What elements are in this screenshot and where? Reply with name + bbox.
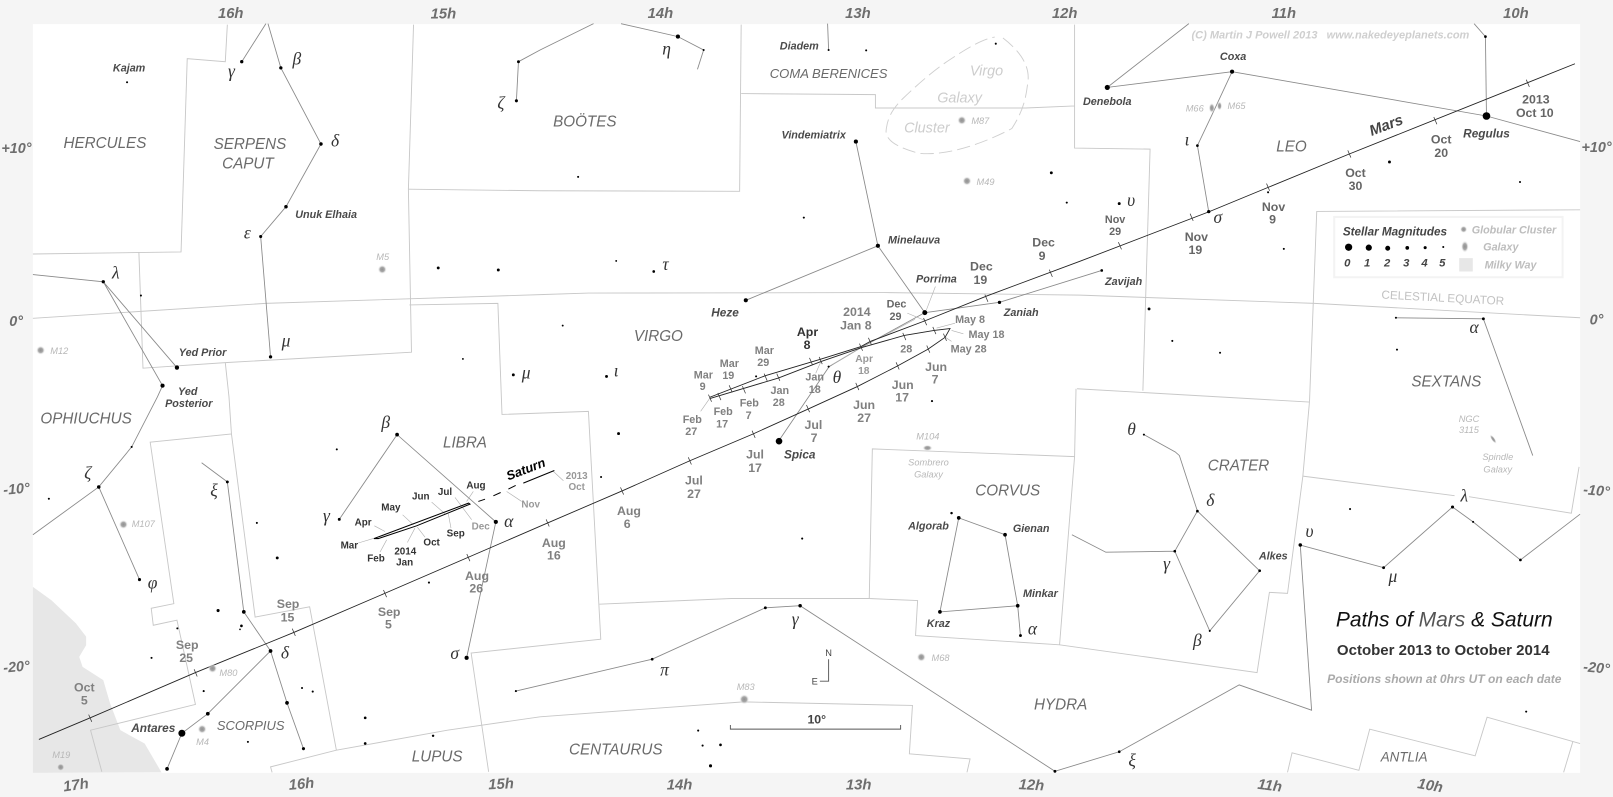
greek letters: γ	[792, 609, 800, 629]
legend: stellar magnitudes: Galaxy	[1483, 241, 1520, 253]
right axis declination labels: -20°	[1583, 659, 1611, 678]
mars date labels: May 8	[955, 314, 985, 326]
top axis hour labels: 12h	[1052, 6, 1077, 22]
title: Paths of Mars & Saturn	[1336, 608, 1553, 631]
virgo galaxy cluster label: Virgo	[970, 64, 1003, 80]
greek letters: θ	[833, 367, 842, 387]
mars date labels: Dec	[887, 298, 906, 310]
mars date labels: Nov	[1105, 214, 1125, 226]
greek letters	[84, 39, 1480, 770]
star names: Zavijah	[1104, 276, 1143, 288]
name: bootes: BOÖTES	[553, 112, 617, 130]
magnitude numbers	[1344, 257, 1446, 269]
virgo galaxy cluster outline	[886, 37, 1028, 154]
mars date labels: 19	[973, 273, 987, 287]
star names: Heze	[711, 306, 739, 320]
mars date labels: 17	[716, 418, 728, 430]
mars date labels: 17	[895, 390, 909, 404]
mars date labels: Jan	[770, 385, 789, 397]
deep sky labels	[50, 101, 1514, 760]
greek letters: ε	[244, 223, 251, 243]
figure: leo	[1107, 24, 1580, 212]
deep sky labels: Galaxy	[1483, 465, 1514, 475]
mars date labels: 5	[81, 694, 88, 708]
mars date labels: 6	[624, 517, 631, 531]
greek letters: γ	[228, 61, 236, 81]
mars date labels	[74, 93, 1554, 708]
star names: Porrima	[916, 273, 957, 285]
right axis declination labels	[1581, 140, 1612, 678]
top axis hour labels: 15h	[431, 7, 456, 23]
figure: crater	[1072, 435, 1260, 631]
mars date labels: Jan 8	[840, 318, 872, 332]
greek letters: β	[380, 412, 390, 432]
deep sky labels: M65	[1227, 101, 1246, 111]
greek letters: μ	[521, 362, 531, 382]
name: crater: CRATER	[1208, 458, 1269, 475]
name: hydra: HYDRA	[1034, 697, 1087, 714]
name: serpens caput: SERPENS	[214, 136, 286, 153]
deep sky labels: 3115	[1459, 425, 1480, 435]
title block	[1327, 608, 1562, 686]
top axis hour labels	[218, 6, 1529, 23]
left axis declination labels: -20°	[3, 658, 31, 677]
mars date labels: Jul	[685, 474, 703, 488]
key: milky way	[1459, 258, 1473, 271]
deep sky labels: NGC	[1459, 414, 1480, 424]
name: hercules: HERCULES	[63, 135, 146, 152]
mars date labels: Jul	[746, 448, 764, 462]
figure: scorpius	[167, 463, 303, 769]
deep sky labels: Galaxy	[914, 470, 944, 480]
mars date labels: 7	[811, 431, 818, 445]
star names: Gienan	[1013, 523, 1050, 535]
mars date labels: Feb	[714, 406, 733, 418]
star names: Diadem	[780, 40, 819, 52]
figure: serpens	[242, 24, 321, 357]
top axis hour labels: 14h	[648, 6, 673, 22]
greek letters: β	[1192, 630, 1202, 650]
figure: corvus	[940, 518, 1020, 636]
copyright	[1192, 30, 1470, 42]
deep sky labels: Sombrero	[908, 458, 949, 468]
deep sky labels: Spindle	[1482, 452, 1513, 462]
legend: stellar magnitudes	[1334, 217, 1563, 277]
star names: Antares	[130, 721, 176, 735]
name: serpens caput: CAPUT	[222, 156, 275, 173]
copyright: (C) Martin J Powell 2013	[1192, 30, 1317, 42]
bottom axis hour labels	[62, 776, 1444, 796]
mars date labels: Mar	[755, 345, 775, 357]
deep sky labels: M49	[976, 177, 994, 187]
saturn date labels: Dec	[472, 521, 490, 532]
figure: libra	[339, 435, 496, 658]
mars date labels: 2014	[843, 305, 871, 319]
name: libra: LIBRA	[443, 435, 487, 452]
magnitude numbers: 5	[1439, 257, 1446, 269]
greek letters: θ	[1127, 419, 1136, 439]
star names: Spica	[784, 447, 816, 461]
mars date labels: Mar	[720, 358, 740, 370]
greek letters: η	[662, 39, 671, 59]
star names: Yed	[178, 386, 198, 398]
saturn date labels: Oct	[423, 538, 441, 549]
saturn date labels: Mar	[341, 540, 358, 551]
saturn date labels: May	[381, 503, 401, 514]
mars date labels: 29	[1109, 226, 1121, 238]
mars date labels: 9	[1039, 249, 1046, 263]
mars date labels: 25	[179, 651, 193, 665]
top axis hour labels: 11h	[1272, 6, 1296, 22]
mars date labels: Aug	[542, 536, 566, 550]
key: galaxy	[1461, 240, 1469, 253]
celestial equator label: CELESTIAL EQUATOR	[1381, 289, 1505, 308]
virgo galaxy cluster label	[904, 64, 1003, 136]
mars date labels: 8	[804, 338, 811, 352]
saturn date labels	[341, 471, 588, 568]
mars date labels: 29	[757, 357, 769, 369]
greek letters: δ	[331, 131, 340, 151]
greek letters: ξ	[210, 480, 218, 500]
legend: stellar magnitudes: Globular Cluster	[1472, 224, 1557, 236]
greek letters: ι	[1185, 130, 1190, 150]
name: scorpius: SCORPIUS	[217, 718, 285, 733]
subtitle: October 2013 to October 2014	[1337, 642, 1550, 659]
saturn date labels: Apr	[355, 518, 372, 529]
mars date labels: Oct	[74, 680, 95, 694]
constellation names	[40, 66, 1481, 766]
deep sky labels: M80	[219, 668, 238, 678]
star names	[113, 40, 1510, 735]
name: virgo: VIRGO	[634, 328, 683, 345]
bottom axis hour labels: 12h	[1018, 777, 1045, 794]
mars date labels: Aug	[465, 569, 489, 583]
mars date labels: Dec	[970, 260, 993, 274]
mars date labels: 16	[547, 549, 561, 563]
mars date labels: 9	[700, 381, 706, 393]
bottom axis hour labels: 16h	[288, 776, 315, 794]
name: corvus: CORVUS	[975, 483, 1040, 500]
greek letters: δ	[1206, 490, 1215, 510]
icon: north east compass: E	[812, 677, 818, 687]
star names: Minkar	[1023, 588, 1059, 600]
mars date labels: 28	[773, 397, 785, 409]
leader lines for date labels	[358, 287, 963, 552]
mars date labels: Jun	[925, 360, 947, 374]
greek letters: λ	[1459, 485, 1468, 505]
mars date labels: Sep	[277, 597, 300, 611]
right axis declination labels: -10°	[1583, 482, 1611, 501]
figure: sextans	[1396, 318, 1533, 456]
mars date labels: 29	[889, 311, 901, 323]
saturn date labels: Jun	[412, 491, 430, 502]
star names: Zaniah	[1003, 307, 1039, 319]
star names: Vindemiatrix	[782, 129, 847, 141]
saturn date labels: Aug	[466, 480, 486, 491]
saturn date labels: Jul	[438, 487, 452, 498]
mars date labels: Oct	[1345, 166, 1366, 180]
deep sky labels: M68	[932, 653, 950, 663]
saturn date labels: Feb	[367, 554, 385, 565]
star names: Denebola	[1083, 96, 1132, 108]
greek letters: ζ	[84, 463, 93, 483]
deep sky labels: M19	[52, 750, 70, 760]
star names: Regulus	[1463, 126, 1510, 140]
greek letters: β	[292, 48, 302, 68]
saturn date labels: 2013	[566, 471, 588, 482]
saturn label: Saturn	[504, 455, 548, 483]
greek letters: λ	[111, 262, 120, 282]
saturn path	[374, 470, 554, 539]
figure: hydra	[516, 507, 1580, 771]
note: Positions shown at 0hrs UT on each date	[1327, 672, 1562, 686]
name: antlia: ANTLIA	[1380, 750, 1428, 765]
deep sky objects	[36, 101, 1498, 771]
mars date labels: 5	[385, 618, 392, 632]
legend: stellar magnitudes: Milky Way	[1485, 259, 1538, 271]
greek letters: ζ	[497, 93, 506, 113]
magnitude numbers: 1	[1364, 257, 1370, 269]
mars date labels: 20	[1434, 146, 1448, 160]
name: leo: LEO	[1276, 138, 1307, 155]
greek letters: ι	[614, 360, 619, 380]
star names: Coxa	[1220, 51, 1246, 63]
star names: Unuk Elhaia	[295, 209, 357, 221]
greek letters: α	[1470, 317, 1480, 337]
mars date labels: 9	[1269, 212, 1276, 226]
name: centaurus: CENTAURUS	[569, 742, 663, 759]
figure: bootes	[516, 24, 704, 101]
mars date labels: Oct	[1431, 133, 1451, 147]
greek letters: γ	[1163, 554, 1171, 574]
star names: Yed Prior	[179, 347, 227, 359]
name: sextans: SEXTANS	[1411, 373, 1481, 390]
mars date labels: 27	[857, 411, 871, 425]
mars date labels: 26	[469, 582, 483, 596]
milky way region	[33, 587, 162, 773]
mars date labels: 17	[748, 461, 762, 475]
deep sky labels: M83	[737, 682, 756, 692]
mars date labels: Jul	[804, 418, 822, 432]
magnitude numbers: 2	[1383, 257, 1391, 269]
magnitude numbers: 0	[1344, 257, 1351, 269]
key: globular cluster	[1460, 226, 1467, 233]
mars date labels: May 28	[951, 344, 987, 356]
icon: north east compass: N	[825, 648, 832, 658]
star names: Alkes	[1258, 551, 1288, 563]
bottom axis hour labels: 13h	[846, 777, 871, 793]
greek letters: δ	[281, 643, 290, 663]
star names: Kajam	[113, 62, 146, 74]
virgo galaxy cluster label: Cluster	[904, 120, 951, 136]
mars date labels: Dec	[1032, 236, 1055, 250]
left axis declination labels	[1, 141, 32, 677]
figure: ophiuchus	[33, 275, 177, 580]
mars date labels: Nov	[1185, 230, 1208, 244]
top axis hour labels: 10h	[1503, 6, 1529, 22]
star names: Algorab	[907, 521, 949, 533]
left axis declination labels: -10°	[3, 480, 31, 499]
figure: virgo	[746, 24, 1102, 441]
deep sky labels: M4	[196, 737, 209, 747]
magnitude numbers: 3	[1403, 257, 1410, 269]
greek letters: μ	[281, 331, 291, 351]
bottom axis hour labels: 17h	[62, 776, 90, 795]
greek letters: α	[1028, 619, 1038, 639]
mars date labels: 7	[746, 410, 752, 422]
bottom axis hour labels: 11h	[1257, 777, 1283, 796]
saturn date labels: 2014	[394, 546, 417, 557]
mars date labels: 28	[900, 344, 912, 356]
mars date labels: Mar	[694, 369, 714, 381]
mars date labels: 18	[858, 366, 870, 377]
saturn date labels: Jan	[396, 557, 413, 568]
bottom axis hour labels: 14h	[667, 777, 692, 793]
greek letters: α	[504, 511, 514, 531]
mars date labels: 27	[685, 426, 697, 438]
mars date labels: Oct 10	[1516, 106, 1554, 120]
scale: 10 degrees: 10°	[807, 713, 826, 727]
mars date labels: Sep	[378, 605, 401, 619]
greek letters: σ	[450, 643, 460, 663]
mars date labels: 19	[722, 370, 734, 382]
left axis declination labels: 0°	[9, 314, 23, 330]
left axis declination labels: +10°	[1, 141, 32, 157]
greek letters: σ	[1213, 207, 1223, 227]
mars date labels: Apr	[855, 354, 873, 365]
mars date labels: Apr	[797, 325, 818, 339]
mars date labels: 27	[687, 487, 701, 501]
mars date labels: 7	[932, 373, 939, 387]
greek letters: φ	[148, 573, 158, 593]
deep sky labels: M12	[50, 346, 69, 356]
magnitude dots	[1345, 244, 1444, 251]
mars date labels: 18	[809, 384, 821, 396]
bottom axis hour labels: 10h	[1416, 776, 1444, 796]
mars date labels: 2013	[1522, 93, 1550, 107]
greek letters: υ	[1127, 190, 1135, 210]
mars date labels: Aug	[617, 504, 641, 518]
greek letters: ξ	[1128, 750, 1136, 770]
mars date labels: Jun	[853, 398, 875, 412]
name: lupus: LUPUS	[412, 749, 463, 766]
bottom axis hour labels: 15h	[488, 776, 514, 793]
mars date labels: Jun	[892, 378, 914, 392]
saturn date labels: Sep	[447, 529, 465, 540]
mars date labels: Jan	[805, 372, 824, 384]
scale: 10 degrees	[730, 713, 901, 729]
icon: north east compass	[812, 648, 832, 687]
mars date labels: Feb	[683, 414, 702, 426]
right axis declination labels: 0°	[1590, 312, 1604, 328]
magnitude numbers: 4	[1420, 257, 1428, 269]
mars date labels: 15	[281, 610, 295, 624]
virgo galaxy cluster label: Galaxy	[937, 91, 983, 107]
deep sky labels: M104	[916, 431, 939, 441]
deep sky labels: M66	[1186, 103, 1205, 113]
deep sky labels: M87	[971, 116, 990, 126]
greek letters: υ	[1306, 521, 1314, 541]
mars date labels: Sep	[176, 638, 199, 652]
mars date labels: 19	[1188, 243, 1202, 257]
greek letters: μ	[1387, 566, 1397, 586]
top axis hour labels: 13h	[845, 6, 871, 22]
mars date labels: 30	[1349, 179, 1363, 193]
greek letters: π	[660, 659, 670, 679]
deep sky labels: M107	[132, 519, 156, 529]
right axis declination labels: +10°	[1581, 140, 1612, 156]
star names: Minelauva	[888, 235, 940, 247]
mars date labels: Nov	[1262, 200, 1285, 214]
mars label: Mars	[1367, 112, 1406, 140]
name: coma berenices: COMA BERENICES	[770, 66, 888, 81]
top axis hour labels: 16h	[218, 6, 243, 22]
saturn date labels: Nov	[521, 499, 541, 510]
mars date labels: May 18	[969, 329, 1005, 341]
greek letters: γ	[323, 505, 331, 525]
legend title: Stellar Magnitudes	[1343, 226, 1447, 239]
star names: Kraz	[927, 618, 951, 630]
saturn date labels: Oct	[568, 482, 586, 493]
mars date labels: Feb	[740, 398, 759, 410]
greek letters: τ	[662, 254, 669, 274]
copyright: www.nakedeyeplanets.com	[1327, 30, 1470, 42]
deep sky labels: M5	[376, 252, 390, 262]
name: ophiuchus: OPHIUCHUS	[40, 410, 132, 427]
star names: Posterior	[165, 398, 213, 410]
